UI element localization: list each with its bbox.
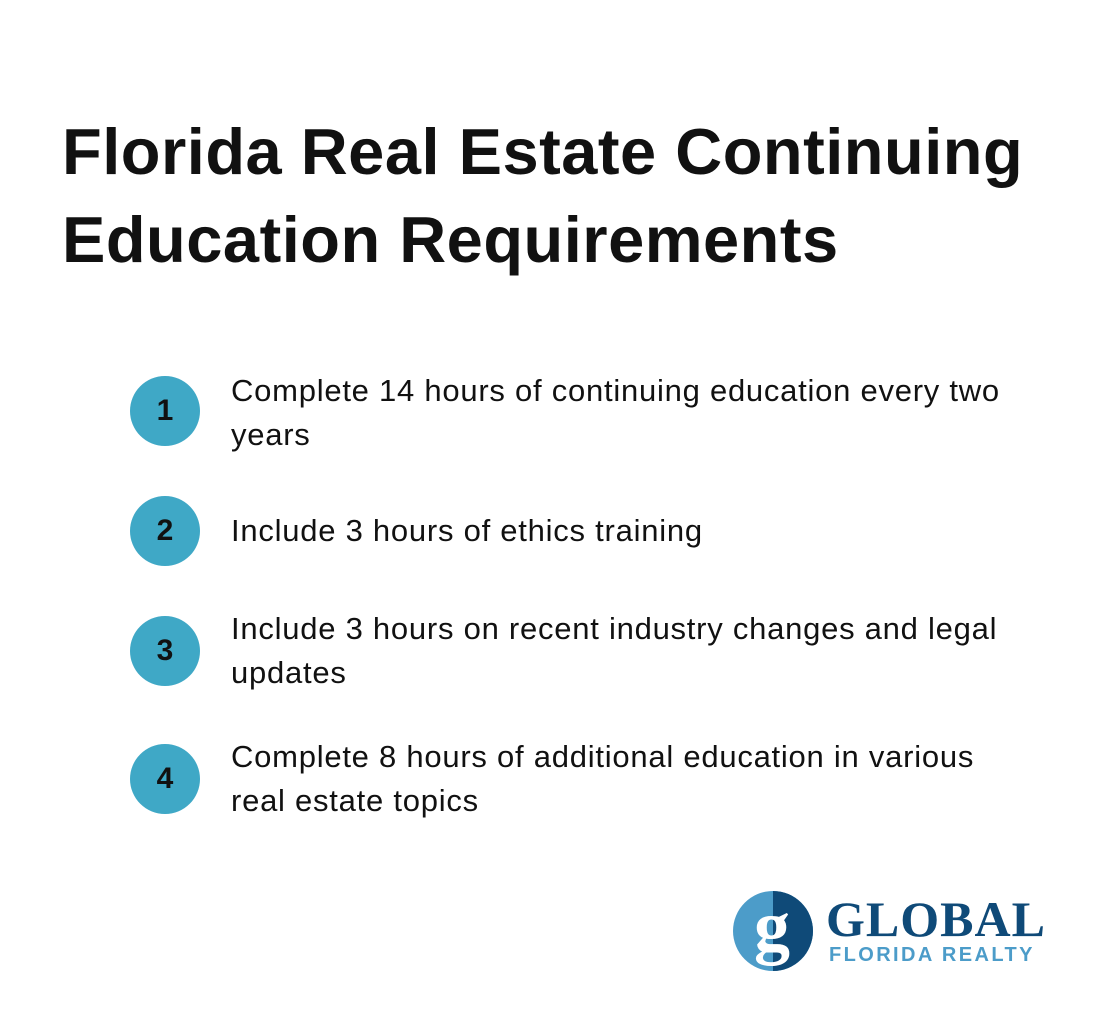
- title: Florida Real Estate Continuing: [62, 115, 1023, 188]
- badge 1: [130, 376, 200, 446]
- badge 3: 3: [157, 634, 173, 667]
- badge 2: [130, 496, 200, 566]
- text 2: Include 3 hours of ethics training: [231, 513, 703, 548]
- item 4: [130, 739, 974, 818]
- text 3: Include 3 hours on recent industry changes and legal updates: [231, 611, 997, 690]
- item 3: [130, 611, 997, 690]
- logo text: GLOBAL: [826, 891, 1046, 947]
- badge 4: [130, 744, 200, 814]
- item 2: [130, 496, 703, 566]
- badge 2: 2: [157, 514, 173, 547]
- item 1: [130, 373, 1000, 452]
- logo: [733, 890, 1046, 971]
- badge 3: [130, 616, 200, 686]
- text 1: Complete 14 hours of continuing education every two years: [231, 373, 1000, 452]
- logo: FLORIDA REALTY: [829, 944, 1035, 966]
- badge 4: 4: [157, 762, 173, 795]
- title: [62, 115, 1023, 276]
- badge 1: 1: [157, 394, 173, 427]
- icon: g circle: [733, 890, 813, 971]
- text 4: Complete 8 hours of additional education in various real estate topics: [231, 739, 974, 818]
- title: Education Requirements: [62, 203, 839, 276]
